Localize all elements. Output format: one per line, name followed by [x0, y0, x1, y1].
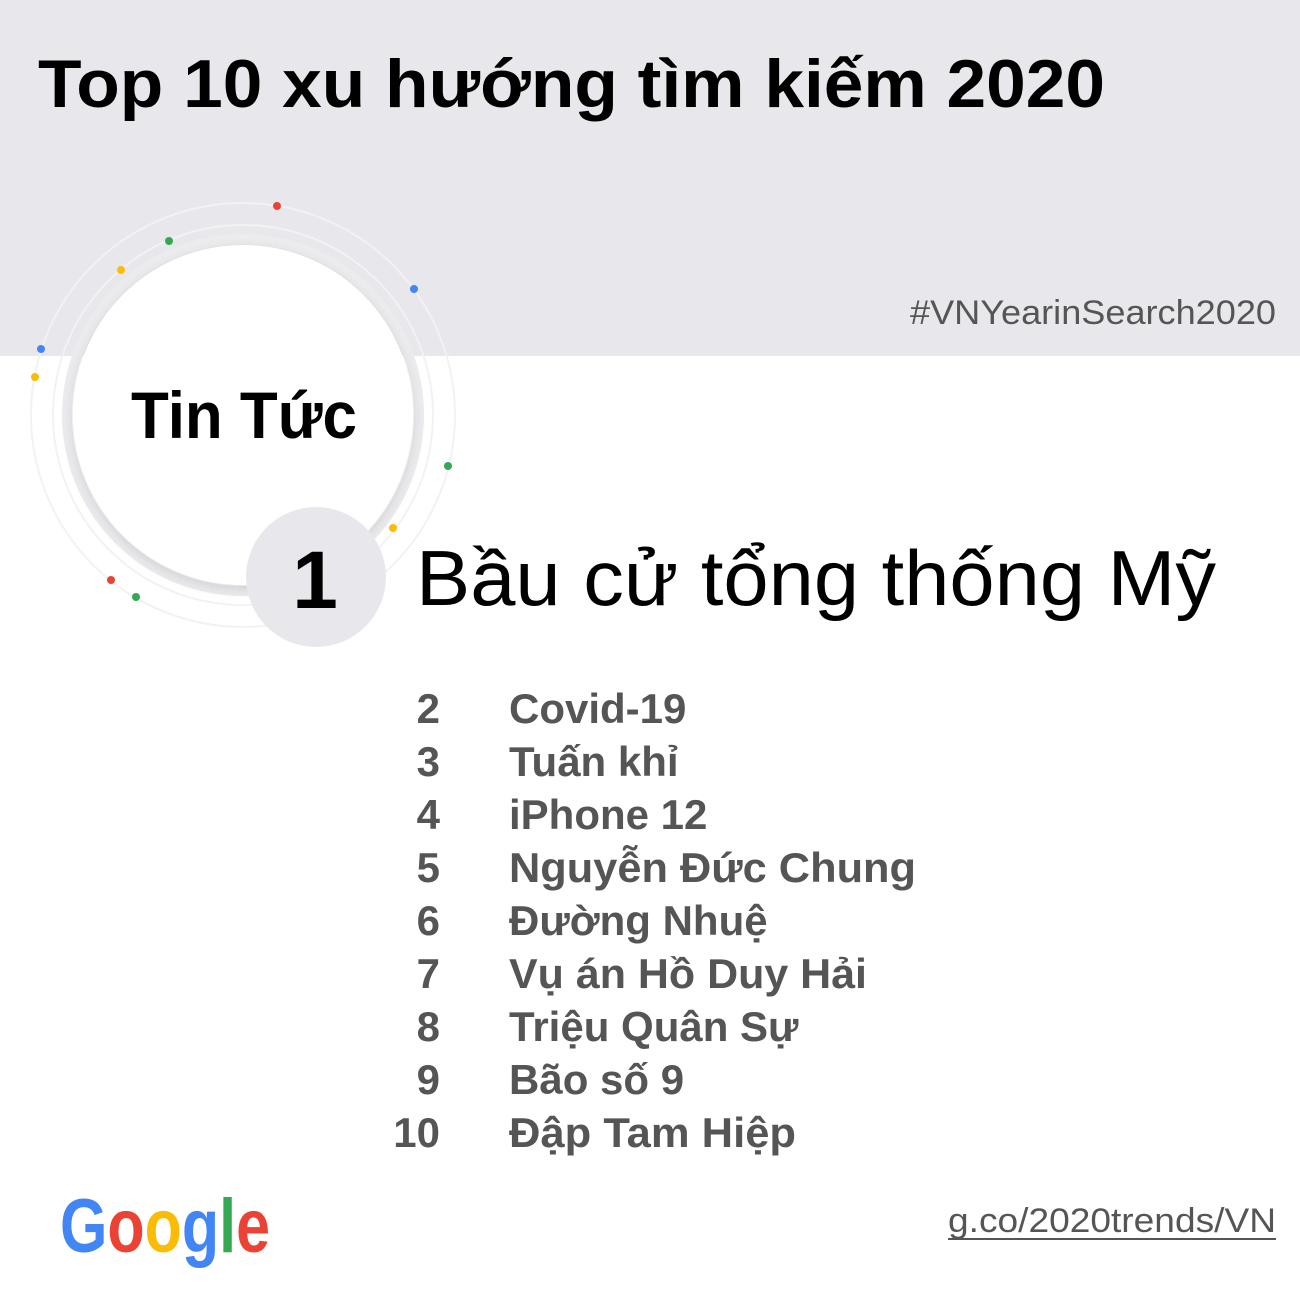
ranked list: 10	[393, 1109, 440, 1156]
ranked list: Covid-19	[509, 685, 686, 732]
ranked list: 6	[417, 897, 440, 944]
rank 1 badge	[246, 507, 386, 647]
category label: Tin Tức	[131, 378, 357, 452]
ranked list: Triệu Quân Sự	[509, 1003, 799, 1050]
google logo: Google	[60, 1184, 270, 1269]
ranked list: 8	[417, 1003, 440, 1050]
ranked list: Đường Nhuệ	[509, 897, 768, 944]
ranked list: 3	[417, 738, 440, 785]
title: Top 10 xu hướng tìm kiếm 2020	[38, 46, 1105, 122]
ranked list: Tuấn khỉ	[509, 738, 679, 785]
ranked list: 7	[417, 950, 440, 997]
header band	[0, 0, 1300, 356]
ranked list: 2	[417, 685, 440, 732]
hashtag: #VNYearinSearch2020	[910, 294, 1276, 332]
ranked list: Bão số 9	[509, 1056, 684, 1103]
top item: Bầu cử tổng thống Mỹ	[416, 534, 1216, 622]
ranked list: Đập Tam Hiệp	[509, 1109, 796, 1156]
ranked list: iPhone 12	[509, 791, 707, 838]
link: g.co/2020trends/VN	[948, 1202, 1276, 1240]
ranked list: 4	[417, 791, 441, 838]
rank 1 badge: 1	[292, 535, 338, 626]
ranked list: Vụ án Hồ Duy Hải	[509, 950, 867, 997]
ranked list: 9	[417, 1056, 440, 1103]
ranked list: Nguyễn Đức Chung	[509, 843, 916, 891]
category circle	[31, 202, 455, 627]
dots	[273, 202, 281, 210]
ranked list: 5	[417, 844, 440, 891]
ranked list	[393, 685, 916, 1156]
